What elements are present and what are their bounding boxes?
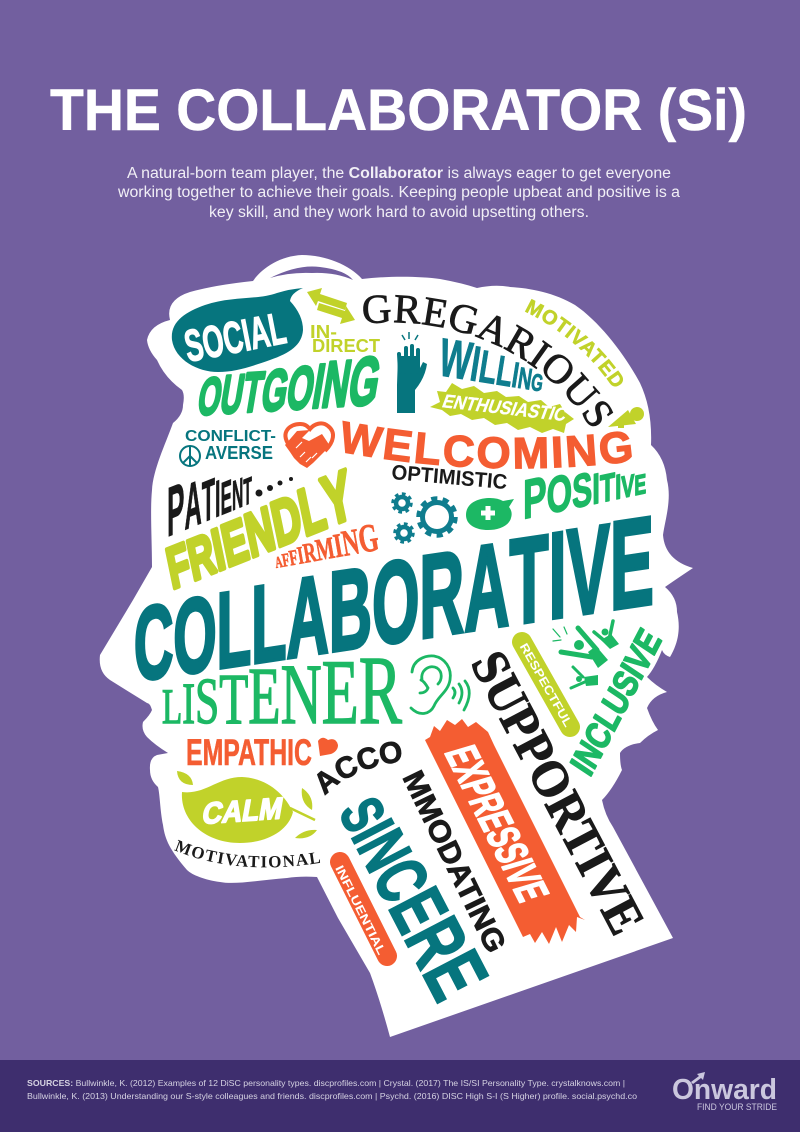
outgoing word: OUTGOING: [193, 342, 386, 430]
dotted trail: [256, 477, 293, 496]
icon: gears: [393, 494, 456, 542]
icon: raised hand: [397, 332, 427, 413]
enthusiastic badge: ENTHUSIASTIC: [439, 392, 570, 426]
sources: SOURCES: Bullwinkle, K. (2012) Examples of 12 DiSC personality types. discprofiles.com | Crystal. (2017) The IS/SI Personality Type. crystalknows.com |: [27, 1078, 625, 1088]
expressive brush stroke: EXPRESSIVE: [434, 741, 558, 907]
influential pill: [332, 862, 389, 957]
indirect label: DIRECT: [312, 336, 380, 356]
icon: group of people: [553, 621, 619, 688]
sources: Bullwinkle, K. (2013) Understanding our S-style colleagues and friends. discprofiles.com | Psychd. (2016) DISC High S-I (S Higher) profile. social.psychd.co: [27, 1091, 637, 1101]
social speech bubble: [172, 288, 303, 372]
title: THE COLLABORATOR (Si): [50, 78, 747, 143]
calm leaf: [177, 771, 317, 843]
icon: two-way arrows: [307, 288, 355, 324]
footer bar: [0, 1060, 800, 1132]
accommodating word: [317, 742, 512, 958]
conflict-averse label: CONFLICT-: [185, 428, 276, 445]
empathic word: EMPATHIC: [186, 732, 312, 773]
inclusive word: INCLUSIVE: [562, 621, 669, 782]
influential pill: INFLUENTIAL: [332, 863, 389, 957]
friendly word: FRIENDLY: [159, 455, 359, 604]
logo: FIND YOUR STRIDE: [697, 1102, 777, 1113]
collaborative word: COLLABORATIVE: [134, 489, 654, 708]
motivated word: MOTIVATED: [524, 298, 623, 386]
icon: ear with sound waves: [411, 656, 469, 714]
icon: plus speech bubble: [466, 498, 514, 530]
positive word: POSITIVE: [523, 443, 646, 531]
accommodating word: ACCO: [317, 742, 402, 796]
indirect label: [310, 322, 380, 356]
listener word: LISTENER: [162, 637, 402, 745]
intro text: A natural-born team player, the Collaborator is always eager to get everyone: [127, 165, 671, 182]
motivational word: MOTIVATIONAL: [174, 840, 320, 868]
social speech bubble: SOCIAL: [180, 302, 290, 372]
enthusiastic badge: [430, 383, 574, 433]
accommodating word: MMODATING: [396, 766, 512, 958]
head silhouette: [100, 255, 693, 1037]
optimistic word: OPTIMISTIC: [391, 461, 508, 494]
patient word: PATIENT: [167, 440, 252, 552]
icon: megaphone: [608, 407, 644, 428]
logo: Onward: [672, 1074, 777, 1106]
hair highlight: [270, 266, 353, 280]
icon: handshake heart: [285, 423, 333, 468]
gregarious word: GREGARIOUS: [363, 294, 614, 426]
supportive word: SUPPORTIVE: [459, 642, 655, 944]
conflict-averse label: [180, 428, 276, 466]
respectful pill: RESPECTFUL: [517, 641, 575, 729]
intro text: key skill, and they work hard to avoid upsetting others.: [209, 204, 589, 221]
intro text: working together to achieve their goals. Keeping people upbeat and positive is a: [117, 184, 680, 201]
willing word: WILLING: [435, 328, 549, 403]
sources: [27, 1078, 637, 1101]
indirect label: IN-: [310, 322, 337, 342]
icon: peace sign: [180, 446, 200, 466]
intro text: [117, 165, 680, 221]
sincere word: SINCERE: [322, 777, 506, 1014]
conflict-averse label: AVERSE: [205, 443, 273, 463]
affirming word: AFFIRMING: [270, 514, 382, 577]
head illustration: [100, 255, 693, 1037]
welcoming word: WELCOMING: [342, 420, 632, 469]
icon: heart: [318, 738, 338, 756]
calm leaf: CALM: [200, 791, 286, 831]
expressive brush stroke: [425, 719, 585, 944]
